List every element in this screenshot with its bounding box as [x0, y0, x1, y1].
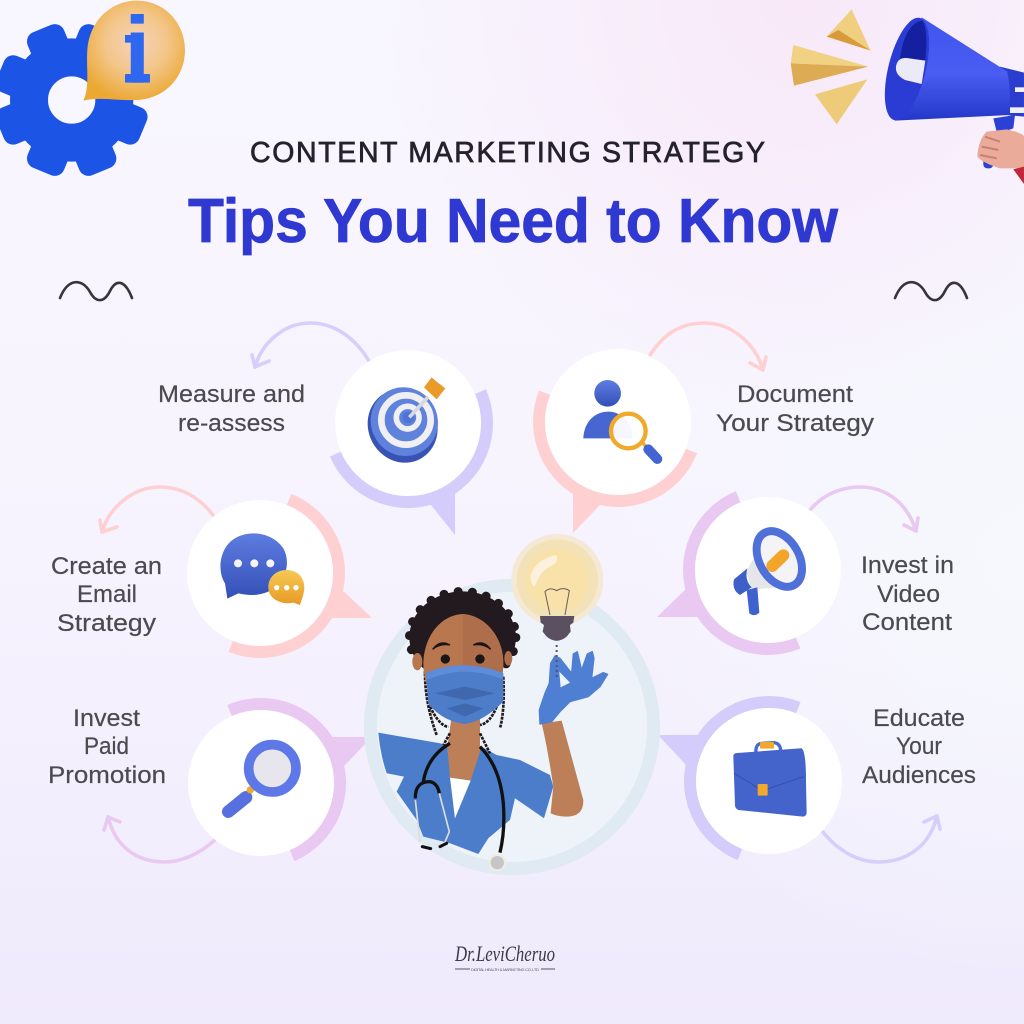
squiggle right	[895, 282, 967, 300]
icon: info speech bubble	[83, 0, 185, 104]
label: invest in video content: Video	[877, 581, 940, 608]
label: invest paid promotion	[48, 705, 166, 789]
label: measure and re-assess: re-assess	[178, 410, 285, 437]
arrow: bottom left curved	[104, 817, 215, 862]
title: content marketing strategy: CONTENT MARKETING STRATEGY	[250, 137, 765, 169]
ring with pointer	[157, 679, 372, 887]
illustration: nurse holding a light bulb	[378, 534, 608, 870]
icon: info speech bubble: i	[124, 0, 151, 104]
arrow: mid left curved	[100, 487, 213, 532]
label: educate your audiences: Your	[896, 733, 942, 760]
ring with pointer	[515, 319, 721, 533]
signature logo: Dr.LeviCheruo	[454, 941, 555, 966]
hair	[409, 591, 516, 683]
label: invest paid promotion: Paid	[84, 733, 129, 760]
arrow: bottom right curved	[823, 816, 940, 862]
label: invest in video content: Content	[862, 609, 952, 636]
label: document your strategy: Your Strategy	[716, 410, 874, 437]
icon: megaphone with gold triangles and hand	[791, 9, 1024, 184]
ring with pointer	[657, 467, 871, 673]
heading: tips you need to know: Tips You Need to Know	[188, 187, 839, 256]
arrow: mid right curved	[810, 487, 918, 531]
label: invest in video content	[861, 552, 954, 636]
stethoscope	[415, 743, 505, 870]
arrow: top right curved	[649, 323, 766, 370]
gloved hand	[539, 645, 608, 724]
squiggle left	[60, 282, 132, 300]
icon: gear	[0, 21, 151, 179]
ring with pointer	[304, 319, 512, 535]
ring with pointer	[658, 678, 872, 884]
neck	[447, 717, 480, 781]
label: educate your audiences	[862, 705, 976, 789]
label: document your strategy	[716, 381, 874, 437]
ring with pointer	[157, 470, 372, 676]
icon: gold triangles	[791, 9, 871, 124]
node: educate your audiences	[658, 678, 872, 884]
label: measure and re-assess	[158, 381, 305, 437]
label: create an email strategy: Create an	[51, 553, 162, 580]
label: invest paid promotion: Invest	[73, 705, 140, 732]
label: create an email strategy	[51, 553, 162, 637]
signature logo	[454, 941, 555, 972]
icon: user with magnifier	[583, 380, 657, 459]
arrow: top left curved	[252, 323, 369, 367]
center circle	[370, 586, 654, 868]
node: invest paid promotion	[157, 679, 372, 887]
icon: hand holding megaphone	[977, 129, 1024, 184]
icon: chat bubbles	[220, 533, 304, 605]
label: invest in video content: Invest in	[861, 552, 954, 579]
signature logo: DIGITAL HEALTH & MARKETING CO. LTD	[471, 967, 539, 972]
icon: blue gear with info bubble	[0, 0, 185, 179]
label: measure and re-assess: Measure and	[158, 381, 305, 408]
face	[423, 614, 503, 722]
ears	[412, 653, 422, 670]
label: invest paid promotion: Promotion	[48, 762, 166, 789]
face mask	[426, 665, 503, 724]
icon: megaphone	[733, 523, 811, 615]
node: create an email strategy	[157, 470, 372, 676]
label: create an email strategy: Email	[77, 581, 137, 608]
label: educate your audiences: Audiences	[862, 762, 976, 789]
scrubs	[378, 733, 553, 854]
icon: megaphone	[876, 13, 1024, 168]
node: invest in video content	[657, 467, 871, 673]
label: create an email strategy: Strategy	[57, 610, 156, 637]
eyes and eyebrows	[433, 643, 491, 664]
icon: magnifying glass	[228, 745, 296, 812]
ear right	[504, 651, 512, 666]
label: document your strategy: Document	[737, 381, 853, 408]
label: educate your audiences: Educate	[873, 705, 965, 732]
node: measure and re-assess	[304, 319, 512, 535]
arm	[542, 721, 583, 817]
icon: target with dart	[355, 375, 450, 475]
icon: briefcase	[733, 742, 807, 817]
light bulb	[511, 534, 603, 641]
node: document your strategy	[515, 319, 721, 533]
braids	[425, 673, 504, 753]
undershirt	[450, 778, 471, 818]
